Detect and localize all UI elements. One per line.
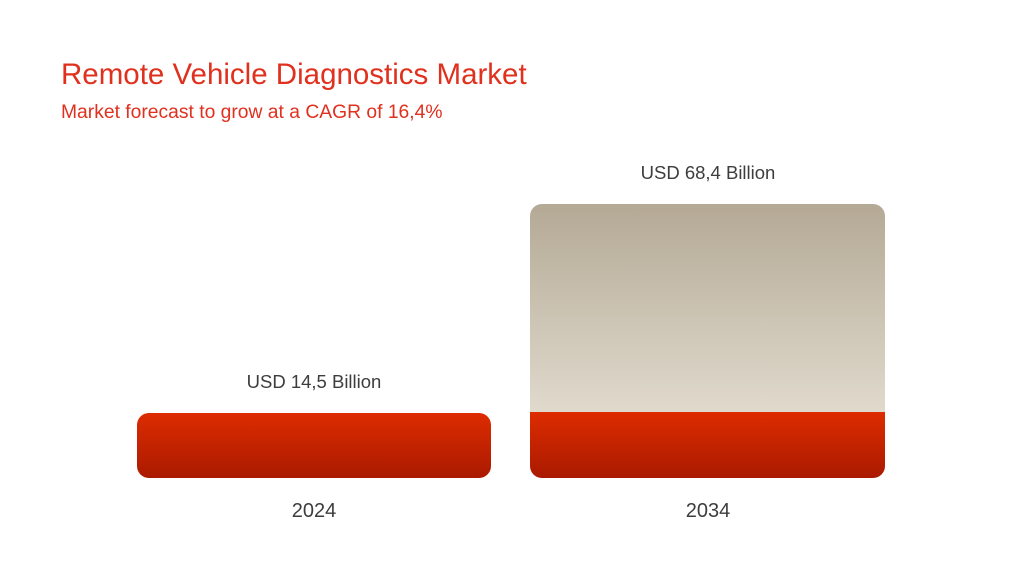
value label 2034: USD 68,4 Billion xyxy=(641,162,775,183)
bar 2024 xyxy=(137,413,491,478)
year label 2034: 2034 xyxy=(686,500,730,522)
bar 2034 xyxy=(530,204,885,478)
subtitle: Market forecast to grow at a CAGR of 16,4% xyxy=(61,102,443,123)
year label 2024: 2024 xyxy=(292,500,336,522)
title: Remote Vehicle Diagnostics Market xyxy=(61,58,527,91)
value label 2024: USD 14,5 Billion xyxy=(247,371,381,392)
bar chart xyxy=(137,162,885,522)
